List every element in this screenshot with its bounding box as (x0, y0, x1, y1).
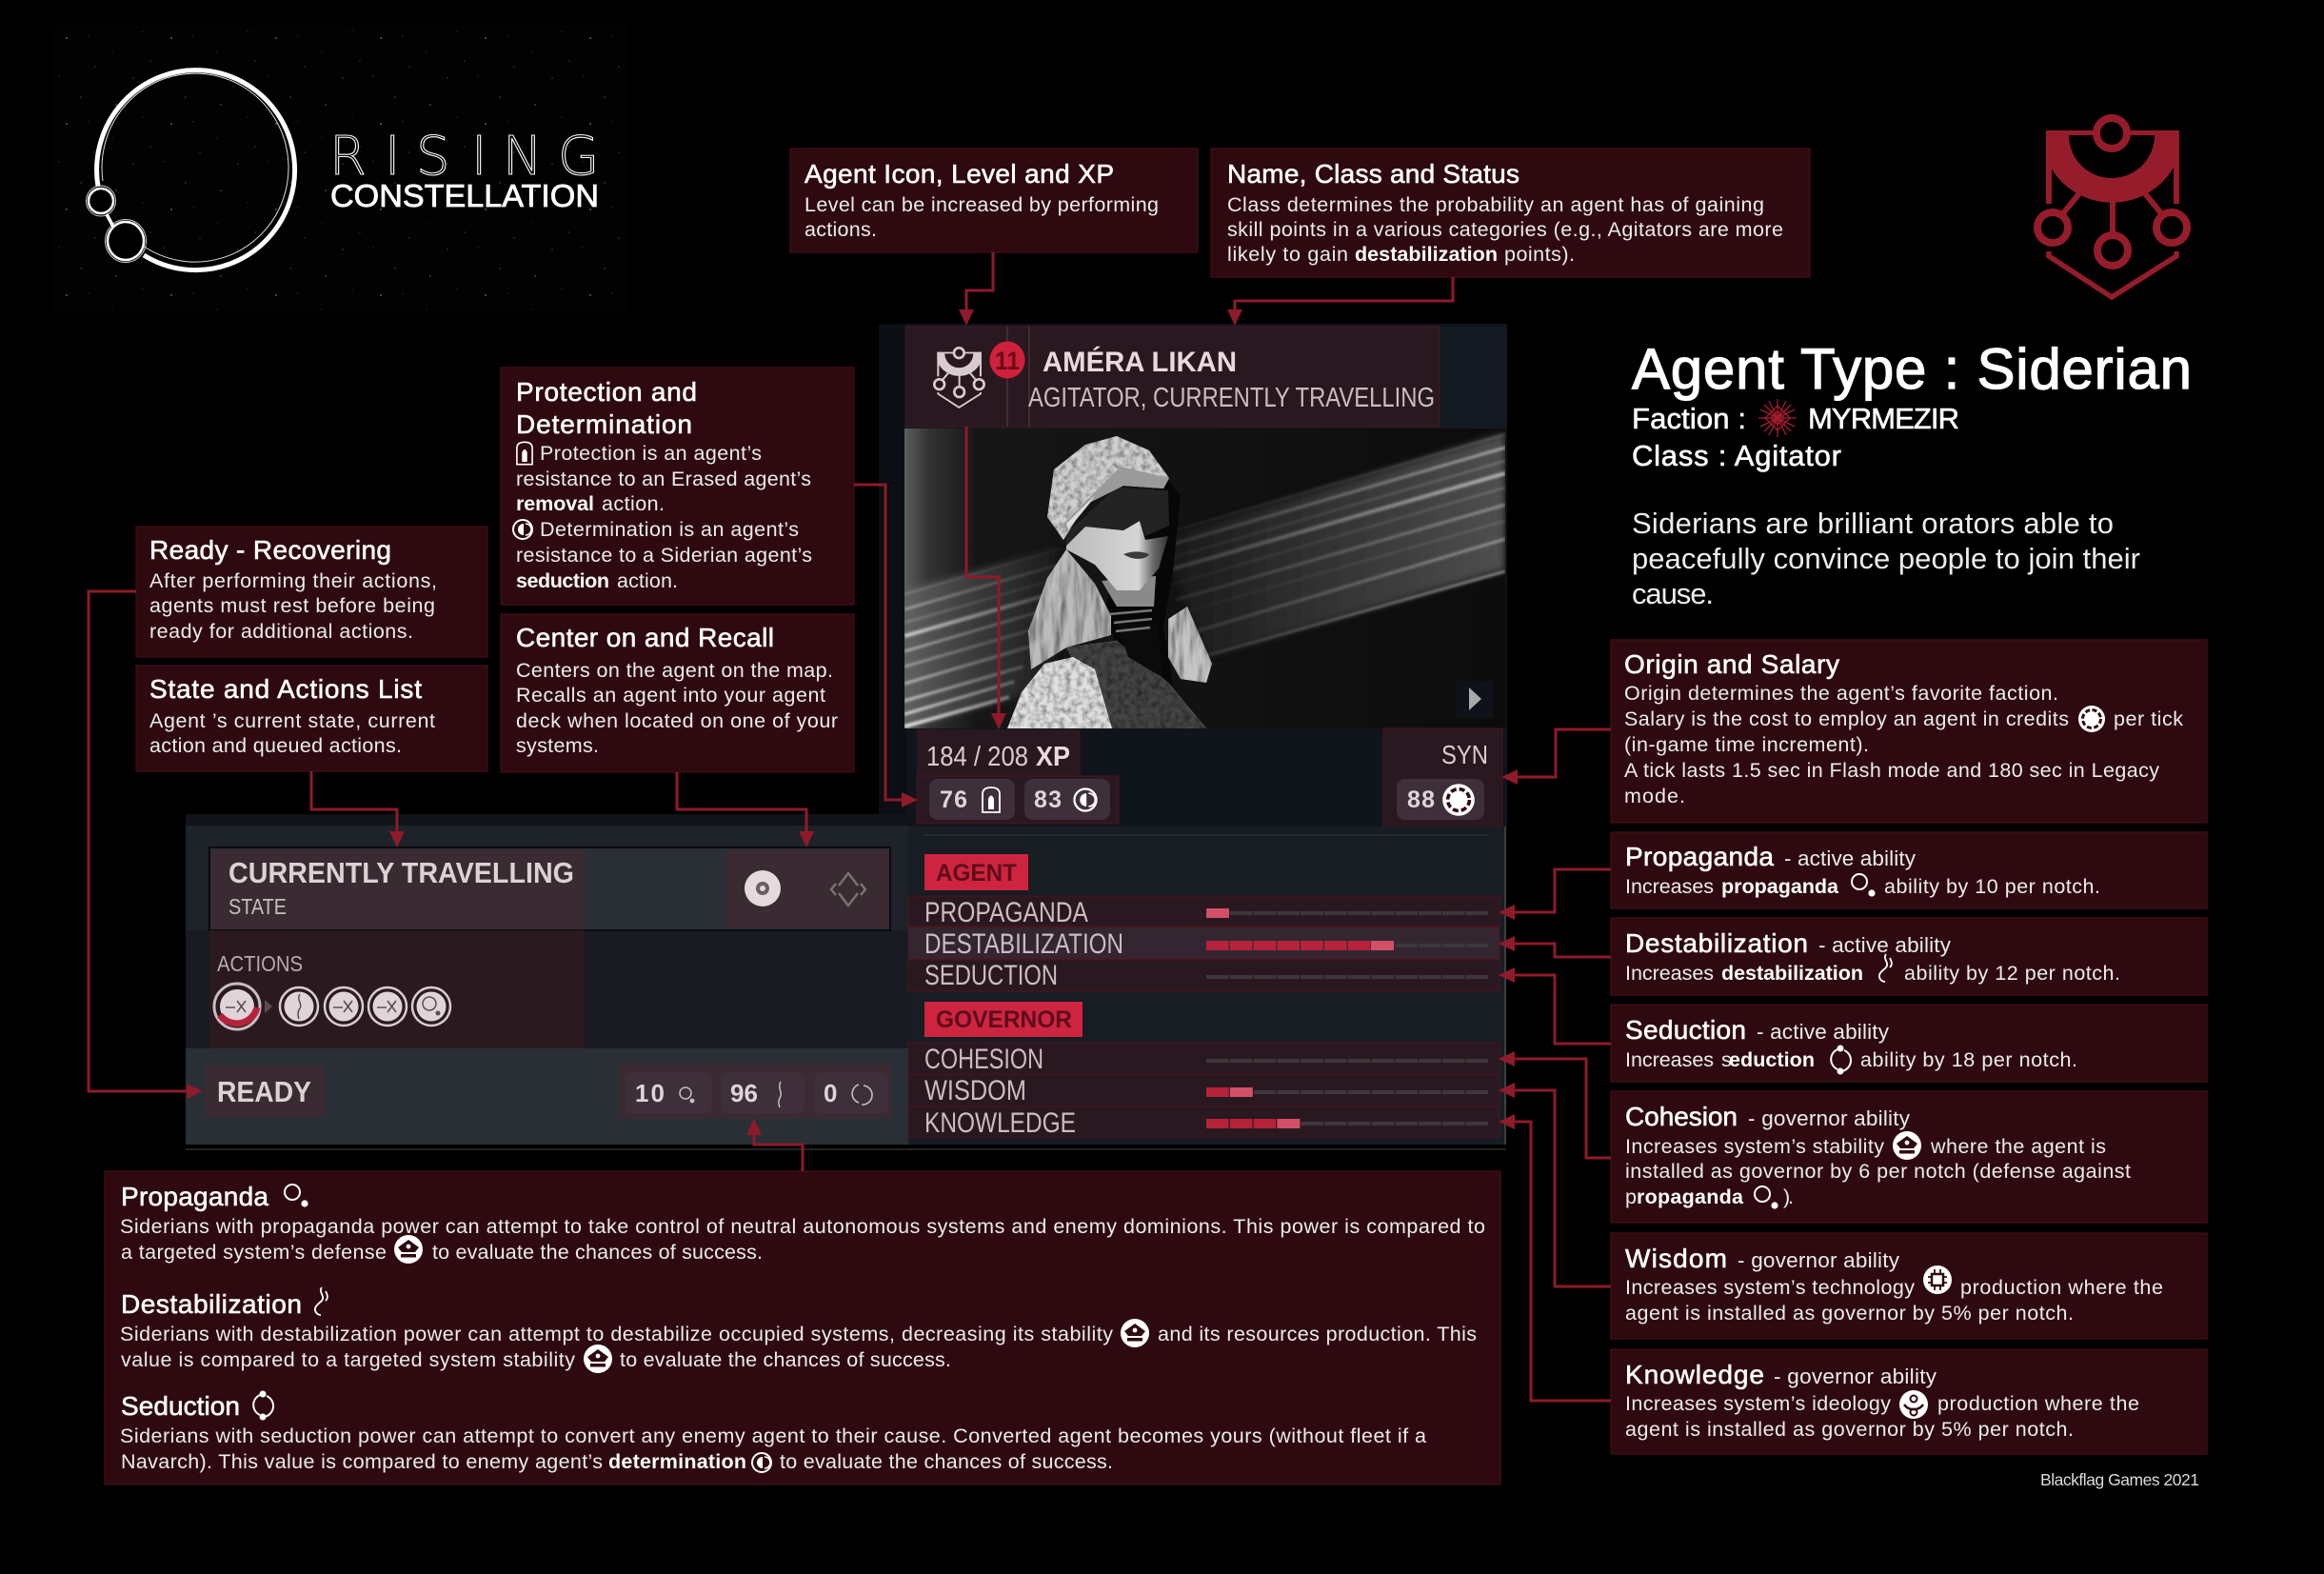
panel: abilities detail: to evaluate the chances of success. (620, 1348, 951, 1371)
panel: Protection and Determination: resistance to a Siderian agent’s (516, 544, 812, 567)
panel: abilities detail: Seduction (121, 1391, 240, 1421)
panel: Name, Class and Status: points). (1504, 243, 1575, 266)
panel: Protection and Determination (501, 368, 854, 605)
panel: Name, Class and Status: Class determines the probability an agent has of gaining (1227, 193, 1764, 216)
heading: Agent Type: MYRMEZIR (1808, 402, 1959, 435)
panel: Cohesion ability: p (1625, 1185, 1637, 1208)
panel: Seduction ability: Seduction (1625, 1015, 1746, 1045)
panel: Cohesion ability (1611, 1091, 2207, 1223)
panel: abilities detail: Siderians with propaganda power can attempt to take control of neutral autonomous systems and enemy dominions. This power is compared to (120, 1215, 1485, 1238)
panel: skills UI (186, 827, 1506, 1149)
hat shadow (1066, 488, 1169, 546)
arrow: protection and determination (854, 485, 918, 807)
panel: Center on and Recall: systems. (516, 734, 599, 757)
panel: Origin and Salary (1611, 640, 2207, 823)
panel: abilities detail: to evaluate the chances of success. (432, 1241, 763, 1264)
credit line: Blackflag Games 2021 (2040, 1470, 2199, 1489)
panel: Origin and Salary: A tick lasts 1.5 sec in Flash mode and 180 sec in Legacy (1624, 759, 2159, 782)
face (1066, 521, 1168, 590)
panel: Origin and Salary: Origin and Salary (1624, 649, 1839, 679)
state overlay (210, 849, 585, 929)
panel: Destabilization ability: Destabilization (1625, 928, 1808, 958)
panel: Wisdom ability: production where the (1960, 1276, 2163, 1299)
panel: abilities detail: Destabilization (121, 1289, 302, 1319)
icon: small agent emblem (934, 348, 984, 408)
panel: Cohesion ability: ropaganda (1637, 1185, 1744, 1208)
ability stat chips: 10 (635, 1079, 665, 1107)
icon: technology chip (1923, 1265, 1952, 1294)
arrow: destabilization (1499, 936, 1611, 957)
panel: Seduction ability: ability by 18 per notch. (1860, 1048, 2077, 1071)
ability stat chips: 96 (730, 1079, 758, 1107)
panel: Cohesion ability: Cohesion (1625, 1102, 1738, 1131)
panel: Seduction ability: eduction (1729, 1048, 1815, 1071)
tag: governor: GOVERNOR (936, 1006, 1072, 1033)
panel: Name, Class and Status: skill points in a various categories (e.g., Agitators are more (1227, 218, 1783, 241)
skill: destabilization: DESTABILIZATION (924, 928, 1123, 960)
skill: wisdom (908, 1074, 1500, 1106)
agent class and status: AGITATOR, CURRENTLY TRAVELLING (1028, 383, 1435, 413)
cap (1047, 436, 1169, 540)
panel: Wisdom ability: Increases system’s technology (1625, 1276, 1915, 1299)
panel: Origin and Salary: (in-game time increment). (1624, 733, 1869, 756)
panel: Origin and Salary: Salary is the cost to employ an agent in credits (1624, 707, 2069, 730)
panel: Agent Icon, Level and XP: Level can be increased by performing (804, 193, 1159, 216)
ready state (205, 1066, 325, 1117)
dark hair behind head (1104, 481, 1181, 686)
panel: Protection and Determination: action. (617, 569, 678, 592)
text block: Siderian description: cause. (1632, 577, 1714, 610)
skill: cohesion: COHESION (924, 1044, 1043, 1075)
agent photo (904, 428, 1505, 728)
panel: Knowledge ability: - governor ability (1774, 1365, 1937, 1388)
panel: Knowledge ability: production where the (1937, 1392, 2139, 1415)
panel: Destabilization ability: destabilization (1721, 962, 1863, 985)
dark body (1066, 641, 1206, 728)
icon: Myrmezir web (1758, 399, 1797, 437)
panel: origin and salary chip: 88 (1407, 787, 1435, 813)
panel: origin and salary chip (1383, 728, 1502, 827)
panel: Wisdom ability: Wisdom (1625, 1244, 1727, 1273)
panel: Ready - Recovering: After performing their actions, (149, 569, 437, 592)
neck and collar (1102, 576, 1156, 607)
actions label: ACTIONS (217, 951, 303, 976)
panel: Wisdom ability: - governor ability (1738, 1248, 1900, 1272)
level badge: 11 (995, 347, 1020, 375)
panel: Name, Class and Status (1211, 149, 1810, 277)
panel: Center on and Recall: deck when located on one of your (516, 709, 838, 732)
panel: XP and defense stats: 83 (1034, 787, 1062, 813)
panel: State and Actions List: State and Actions List (149, 674, 422, 704)
panel: abilities detail: and its resources production. This (1158, 1323, 1477, 1345)
arrow: abilities detail (746, 1119, 803, 1171)
panel: origin and salary chip: SYN (1441, 740, 1488, 769)
ability stat chips (618, 1064, 891, 1119)
panel: agent card top (879, 324, 1507, 828)
panel: Destabilization ability: Increases (1625, 962, 1714, 985)
panel: Knowledge ability (1611, 1349, 2207, 1454)
panel: Seduction ability: Increases (1625, 1048, 1714, 1071)
arrow: wisdom (1499, 1083, 1611, 1286)
shoulder (1007, 657, 1112, 728)
agent name: AMÉRA LIKAN (1043, 346, 1237, 378)
panel: Cohesion ability: where the agent is (1930, 1135, 2106, 1158)
panel: Origin and Salary: per tick (2114, 707, 2183, 730)
panel: Protection and Determination: Determination is an agent’s (540, 518, 799, 541)
panel: Origin and Salary: Origin determines the agent’s favorite faction. (1624, 682, 2058, 705)
panel: XP and defense stats (917, 729, 1119, 824)
arrow: name to card (1227, 277, 1453, 326)
panel: Propaganda ability: Propaganda (1625, 842, 1774, 871)
panel: XP and defense stats: 76 (940, 787, 967, 813)
panel: Wisdom ability: agent is installed as governor by 5% per notch. (1625, 1302, 2074, 1325)
panel: Cohesion ability: - governor ability (1748, 1106, 1911, 1130)
tag: agent: AGENT (936, 860, 1017, 887)
logo: Rising Constellation: RISING (329, 126, 599, 188)
logo: Rising Constellation (53, 26, 628, 314)
panel: abilities detail: to evaluate the chances of success. (780, 1450, 1113, 1473)
panel: Protection and Determination: Protection and (516, 377, 697, 407)
panel: Agent Icon, Level and XP: Agent Icon, Level and XP (804, 159, 1114, 189)
skill: cohesion (908, 1043, 1500, 1075)
actions overlay (209, 930, 585, 1048)
skill: knowledge: KNOWLEDGE (924, 1107, 1076, 1139)
skill: seduction (908, 960, 1500, 991)
heading: Agent Type: Faction : (1632, 402, 1746, 435)
panel: Cohesion ability: installed as governor by 6 per notch (defense against (1625, 1160, 2131, 1183)
panel: Ready - Recovering (136, 527, 487, 657)
header overlay (906, 327, 1440, 427)
panel: abilities detail: Propaganda (121, 1182, 268, 1211)
panel: Name, Class and Status: destabilization (1355, 243, 1498, 266)
heading: Agent Type: Class : Agitator (1632, 439, 1841, 472)
panel: Propaganda ability: Increases (1625, 875, 1714, 898)
text block: Siderian description (1632, 507, 2140, 610)
panel: Protection and Determination: removal (516, 492, 594, 515)
panel: Destabilization ability: ability by 12 per notch. (1904, 962, 2120, 985)
panel: abilities detail: determination (608, 1450, 746, 1473)
state title: CURRENTLY TRAVELLING (228, 856, 574, 889)
panel: Protection and Determination: action. (602, 492, 665, 515)
panel: Protection and Determination: seduction (516, 569, 609, 592)
panel: Destabilization ability: - active ability (1818, 933, 1952, 957)
panel: Seduction ability: - active ability (1757, 1020, 1890, 1044)
arrow: XP (966, 427, 1006, 729)
panel: Propaganda ability (1611, 832, 2207, 908)
tag: agent (924, 854, 1028, 890)
panel: Center on and Recall (501, 614, 854, 772)
panel: Protection and Determination: resistance to an Erased agent’s (516, 468, 811, 490)
skill: propaganda: PROPAGANDA (924, 897, 1088, 928)
cap visor (1063, 467, 1169, 533)
faction emblem: Siderian (2037, 118, 2187, 297)
panel: Knowledge ability: agent is installed as governor by 5% per notch. (1625, 1418, 2074, 1441)
panel: Knowledge ability: Increases system’s ideology (1625, 1392, 1891, 1415)
arrow: state (311, 771, 405, 847)
level badge (990, 341, 1024, 379)
panel: Cohesion ability: ). (1783, 1185, 1794, 1208)
panel: Seduction ability: s (1721, 1048, 1732, 1071)
ability stat chips: 0 (824, 1079, 837, 1107)
panel: XP and defense stats: XP (1036, 742, 1070, 772)
panel: abilities detail: Siderians with destabilization power can attempt to destabilize occupied systems, decreasing its stability (120, 1323, 1113, 1345)
panel: abilities detail (105, 1171, 1500, 1484)
right hair (1168, 607, 1212, 683)
icon: ideology (1899, 1390, 1928, 1419)
left hair (1028, 549, 1111, 669)
arrow: agent icon to card (959, 252, 993, 326)
arrow: ready (89, 591, 203, 1099)
panel: Origin and Salary: mode. (1624, 785, 1685, 807)
panel: Center on and Recall: Recalls an agent into your agent (516, 684, 825, 707)
panel: Wisdom ability (1611, 1233, 2207, 1339)
panel: Ready - Recovering: ready for additional actions. (149, 620, 413, 643)
panel: Agent Icon, Level and XP (790, 149, 1198, 252)
skill: knowledge (908, 1106, 1500, 1139)
panel: Ready - Recovering: Ready - Recovering (149, 535, 391, 565)
skill: wisdom: WISDOM (924, 1075, 1026, 1106)
panel: XP and defense stats: 184 / 208 (926, 742, 1028, 772)
skill: destabilization (908, 927, 1500, 960)
arrow: knowledge (1499, 1114, 1611, 1401)
tag: governor (924, 1002, 1083, 1037)
panel: Propaganda ability: ability by 10 per notch. (1884, 875, 2100, 898)
panel: agent card header content (934, 341, 1435, 413)
panel: Center on and Recall: Center on and Recall (516, 623, 774, 652)
action queue (214, 984, 450, 1029)
panel: State and Actions List (136, 666, 487, 771)
arrow: center and recall (677, 772, 814, 847)
panel: Propaganda ability: - active ability (1784, 847, 1917, 870)
panel: abilities detail: Siderians with seduction power can attempt to convert any enemy agent to their cause. Converted agent becomes yours (without fleet if a (120, 1425, 1426, 1447)
skill: propaganda (908, 896, 1500, 928)
panel: Destabilization ability (1611, 918, 2207, 995)
panel: Protection and Determination: Protection is an agent’s (540, 442, 762, 465)
panel: abilities detail: value is compared to a targeted system stability (121, 1348, 575, 1371)
ready state: READY (217, 1075, 311, 1108)
panel: abilities detail: a targeted system’s defense (121, 1241, 387, 1264)
panel: Seduction ability (1611, 1005, 2207, 1082)
text block: Siderian description: Siderians are brilliant orators able to (1632, 507, 2114, 540)
panel: Ready - Recovering: agents must rest before being (149, 594, 435, 617)
arrow: cohesion (1499, 1051, 1611, 1158)
arrow: seduction (1499, 967, 1611, 1044)
panel: Agent Icon, Level and XP: actions. (804, 218, 877, 241)
panel: abilities detail: Navarch). This value is compared to enemy agent’s (121, 1450, 603, 1473)
center and recall buttons (726, 849, 889, 928)
arrow: origin and salary (1501, 729, 1611, 785)
state label: STATE (228, 894, 287, 919)
heading: Agent Type (1632, 337, 2192, 472)
panel: Center on and Recall: Centers on the agent on the map. (516, 659, 833, 682)
logo: Rising Constellation: CONSTELLATION (330, 178, 599, 213)
panel: State and Actions List: action and queued actions. (149, 734, 402, 757)
button: next image (1457, 681, 1493, 718)
panel: Name, Class and Status: Name, Class and Status (1227, 159, 1520, 189)
panel: Propaganda ability: propaganda (1721, 875, 1839, 898)
skill: seduction: SEDUCTION (924, 960, 1058, 991)
panel: state and actions UI (186, 814, 908, 1145)
panel: Name, Class and Status: likely to gain (1227, 243, 1348, 266)
panel: Protection and Determination: Determination (516, 409, 692, 439)
heading: Agent Type: Agent Type : Siderian (1632, 337, 2192, 401)
arrow: propaganda (1499, 869, 1611, 920)
panel: Knowledge ability: Knowledge (1625, 1360, 1764, 1389)
panel: Cohesion ability: Increases system’s stability (1625, 1135, 1884, 1158)
text block: Siderian description: peacefully convince people to join their (1632, 542, 2140, 575)
panel: State and Actions List: Agent ’s current state, current (149, 709, 435, 732)
